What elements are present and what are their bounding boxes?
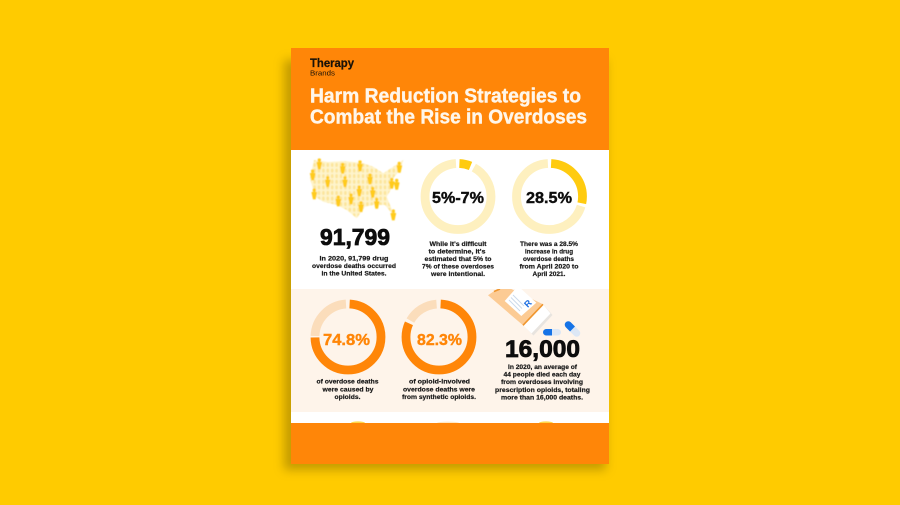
caption: 91,799: overdose deaths occurred xyxy=(312,263,396,270)
footer band xyxy=(291,423,609,464)
donut chart: 74.8%: 74.8% xyxy=(323,332,370,349)
caption: 91,799: in the United States. xyxy=(322,270,387,278)
caption: 5%-7%: were intentional. xyxy=(430,271,485,278)
icon: US map of people xyxy=(310,158,403,220)
bottle cap end xyxy=(532,306,552,336)
caption: 74.8%: of overdose deaths xyxy=(316,379,379,386)
caption: 82.3%: overdose deaths were xyxy=(403,386,475,393)
caption: 82.3% xyxy=(402,379,476,401)
bottle body xyxy=(488,285,543,325)
title: Harm Reduction Strategies to xyxy=(310,86,581,108)
label symbol: R xyxy=(522,297,534,309)
caption: 16,000 xyxy=(495,364,590,402)
caption: 74.8%: opioids. xyxy=(334,394,361,401)
bottle end highlight xyxy=(523,304,550,334)
caption: 16,000: 44 people died each day xyxy=(504,372,581,379)
icon: pill bottle xyxy=(488,285,552,336)
icon tips: cut-off next section xyxy=(351,421,553,425)
icon: horizontal capsule xyxy=(543,329,561,336)
caption: 82.3%: from synthetic opioids. xyxy=(402,394,476,401)
caption: 16,000: prescription opioids, totaling xyxy=(495,387,590,394)
label xyxy=(505,286,536,316)
donut chart: 82.3% xyxy=(406,304,472,370)
panel: national statistics xyxy=(310,158,582,278)
caption: 16,000: from overdoses involving xyxy=(501,379,583,386)
caption: 5%-7%: While it's difficult xyxy=(430,241,487,248)
top stripe xyxy=(494,289,500,292)
caption: 5%-7%: estimated that 5% to xyxy=(424,256,492,263)
donut chart: 28.5% xyxy=(516,164,582,230)
band line xyxy=(523,304,543,325)
caption: 5%-7%: to determine, it's xyxy=(428,249,486,256)
document shadow xyxy=(284,60,606,470)
caption: 28.5%: There was a 28.5% xyxy=(520,241,578,248)
donut chart: 74.8% xyxy=(315,304,381,370)
label lines xyxy=(509,295,524,311)
caption: 16,000: more than 16,000 deaths. xyxy=(501,394,583,402)
caption: 82.3%: of opioid-involved xyxy=(409,379,470,386)
page background xyxy=(291,48,609,464)
donut chart: 5%-7% xyxy=(425,164,491,230)
caption: 74.8% xyxy=(316,379,379,401)
caption: 74.8%: were caused by xyxy=(321,386,374,393)
caption: 28.5%: from April 2020 to xyxy=(520,264,578,271)
caption: 91,799 xyxy=(312,256,396,278)
logo: Therapy xyxy=(310,56,354,70)
panel: opioid statistics xyxy=(291,285,609,412)
donut chart: 28.5%: 28.5% xyxy=(526,190,572,207)
stat: 16,000: 16,000 xyxy=(505,336,580,363)
caption: 91,799: In 2020, 91,799 drug xyxy=(320,256,388,262)
caption: 28.5%: increase in drug xyxy=(525,249,573,256)
donut chart: 5%-7%: 5%-7% xyxy=(432,190,484,207)
title xyxy=(310,86,587,128)
infographic document xyxy=(291,48,609,464)
caption: 5%-7%: 7% of these overdoses xyxy=(422,264,494,271)
icon: diagonal capsule xyxy=(563,320,582,338)
title: Combat the Rise in Overdoses xyxy=(310,106,587,128)
stat: 91,799: 91,799 xyxy=(320,224,390,250)
caption: 5%-7% xyxy=(422,241,494,278)
caption: 16,000: In 2020, an average of xyxy=(508,364,578,371)
header band xyxy=(291,48,609,150)
caption: 28.5%: April 2021. xyxy=(532,271,566,278)
donut chart: 82.3%: 82.3% xyxy=(417,332,462,349)
logo: Brands xyxy=(310,68,335,78)
logo xyxy=(310,56,354,78)
caption: 28.5%: overdose deaths xyxy=(523,256,574,263)
caption: 28.5% xyxy=(520,241,578,278)
